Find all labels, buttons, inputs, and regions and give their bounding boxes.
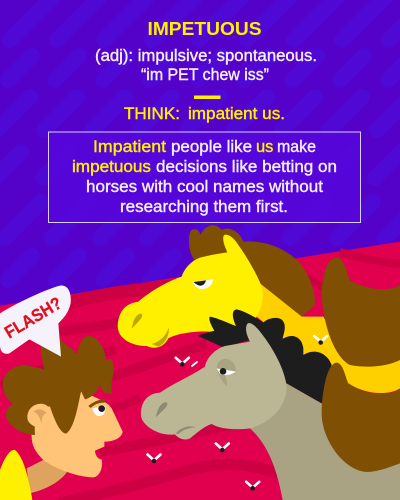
gray horse body bbox=[250, 383, 400, 500]
background pattern bbox=[0, 0, 400, 280]
yellow horse bbox=[118, 225, 400, 393]
think line bbox=[124, 105, 285, 123]
divider bbox=[194, 96, 220, 99]
gray horse eye bbox=[217, 359, 236, 386]
sentence text: people like bbox=[171, 138, 252, 156]
sentence text: make bbox=[277, 138, 316, 156]
gray horse mouth bbox=[176, 426, 196, 434]
yellow shirt bbox=[0, 450, 32, 500]
sentence text: horses with cool names without bbox=[86, 178, 323, 196]
face bbox=[31, 390, 123, 477]
gray horse head bbox=[141, 323, 287, 439]
think line: impatient us. bbox=[188, 105, 285, 123]
yellow horse eye bbox=[192, 279, 213, 289]
gray horse nostril bbox=[156, 402, 167, 417]
neck bbox=[27, 460, 68, 493]
hair bbox=[3, 336, 114, 435]
definition: “im PET chew iss” bbox=[141, 66, 269, 84]
title: IMPETUOUS bbox=[148, 18, 262, 39]
black mane bbox=[197, 309, 332, 403]
yellow horse head bbox=[118, 235, 263, 348]
brown mane of yellow horse bbox=[189, 225, 315, 317]
yellow horse mouth bbox=[152, 327, 169, 347]
definition bbox=[95, 47, 317, 84]
flies bbox=[148, 336, 327, 491]
bubble text: FLASH? bbox=[1, 293, 65, 342]
gray horse bbox=[141, 309, 400, 500]
man bbox=[0, 286, 123, 500]
think line: THINK: bbox=[124, 105, 180, 123]
right brown mane upper bbox=[322, 258, 400, 367]
eye and brow bbox=[88, 399, 105, 416]
sentence text: Impatient bbox=[93, 138, 166, 156]
yellow horse neck bbox=[257, 283, 400, 393]
sentence text bbox=[72, 138, 337, 216]
sentence text: us bbox=[256, 138, 273, 156]
sentence text: researching them first. bbox=[120, 198, 288, 216]
sentence text: decisions like betting on bbox=[156, 158, 337, 176]
right brown mane lower bbox=[322, 363, 400, 472]
yellow horse nostril bbox=[132, 314, 142, 329]
sentence text: impetuous bbox=[72, 158, 151, 176]
speech bubble shape bbox=[0, 286, 71, 357]
ear bbox=[27, 404, 53, 429]
sentence box bbox=[48, 132, 360, 222]
definition: (adj): impulsive; spontaneous. bbox=[95, 47, 317, 65]
red ground bbox=[0, 242, 400, 500]
